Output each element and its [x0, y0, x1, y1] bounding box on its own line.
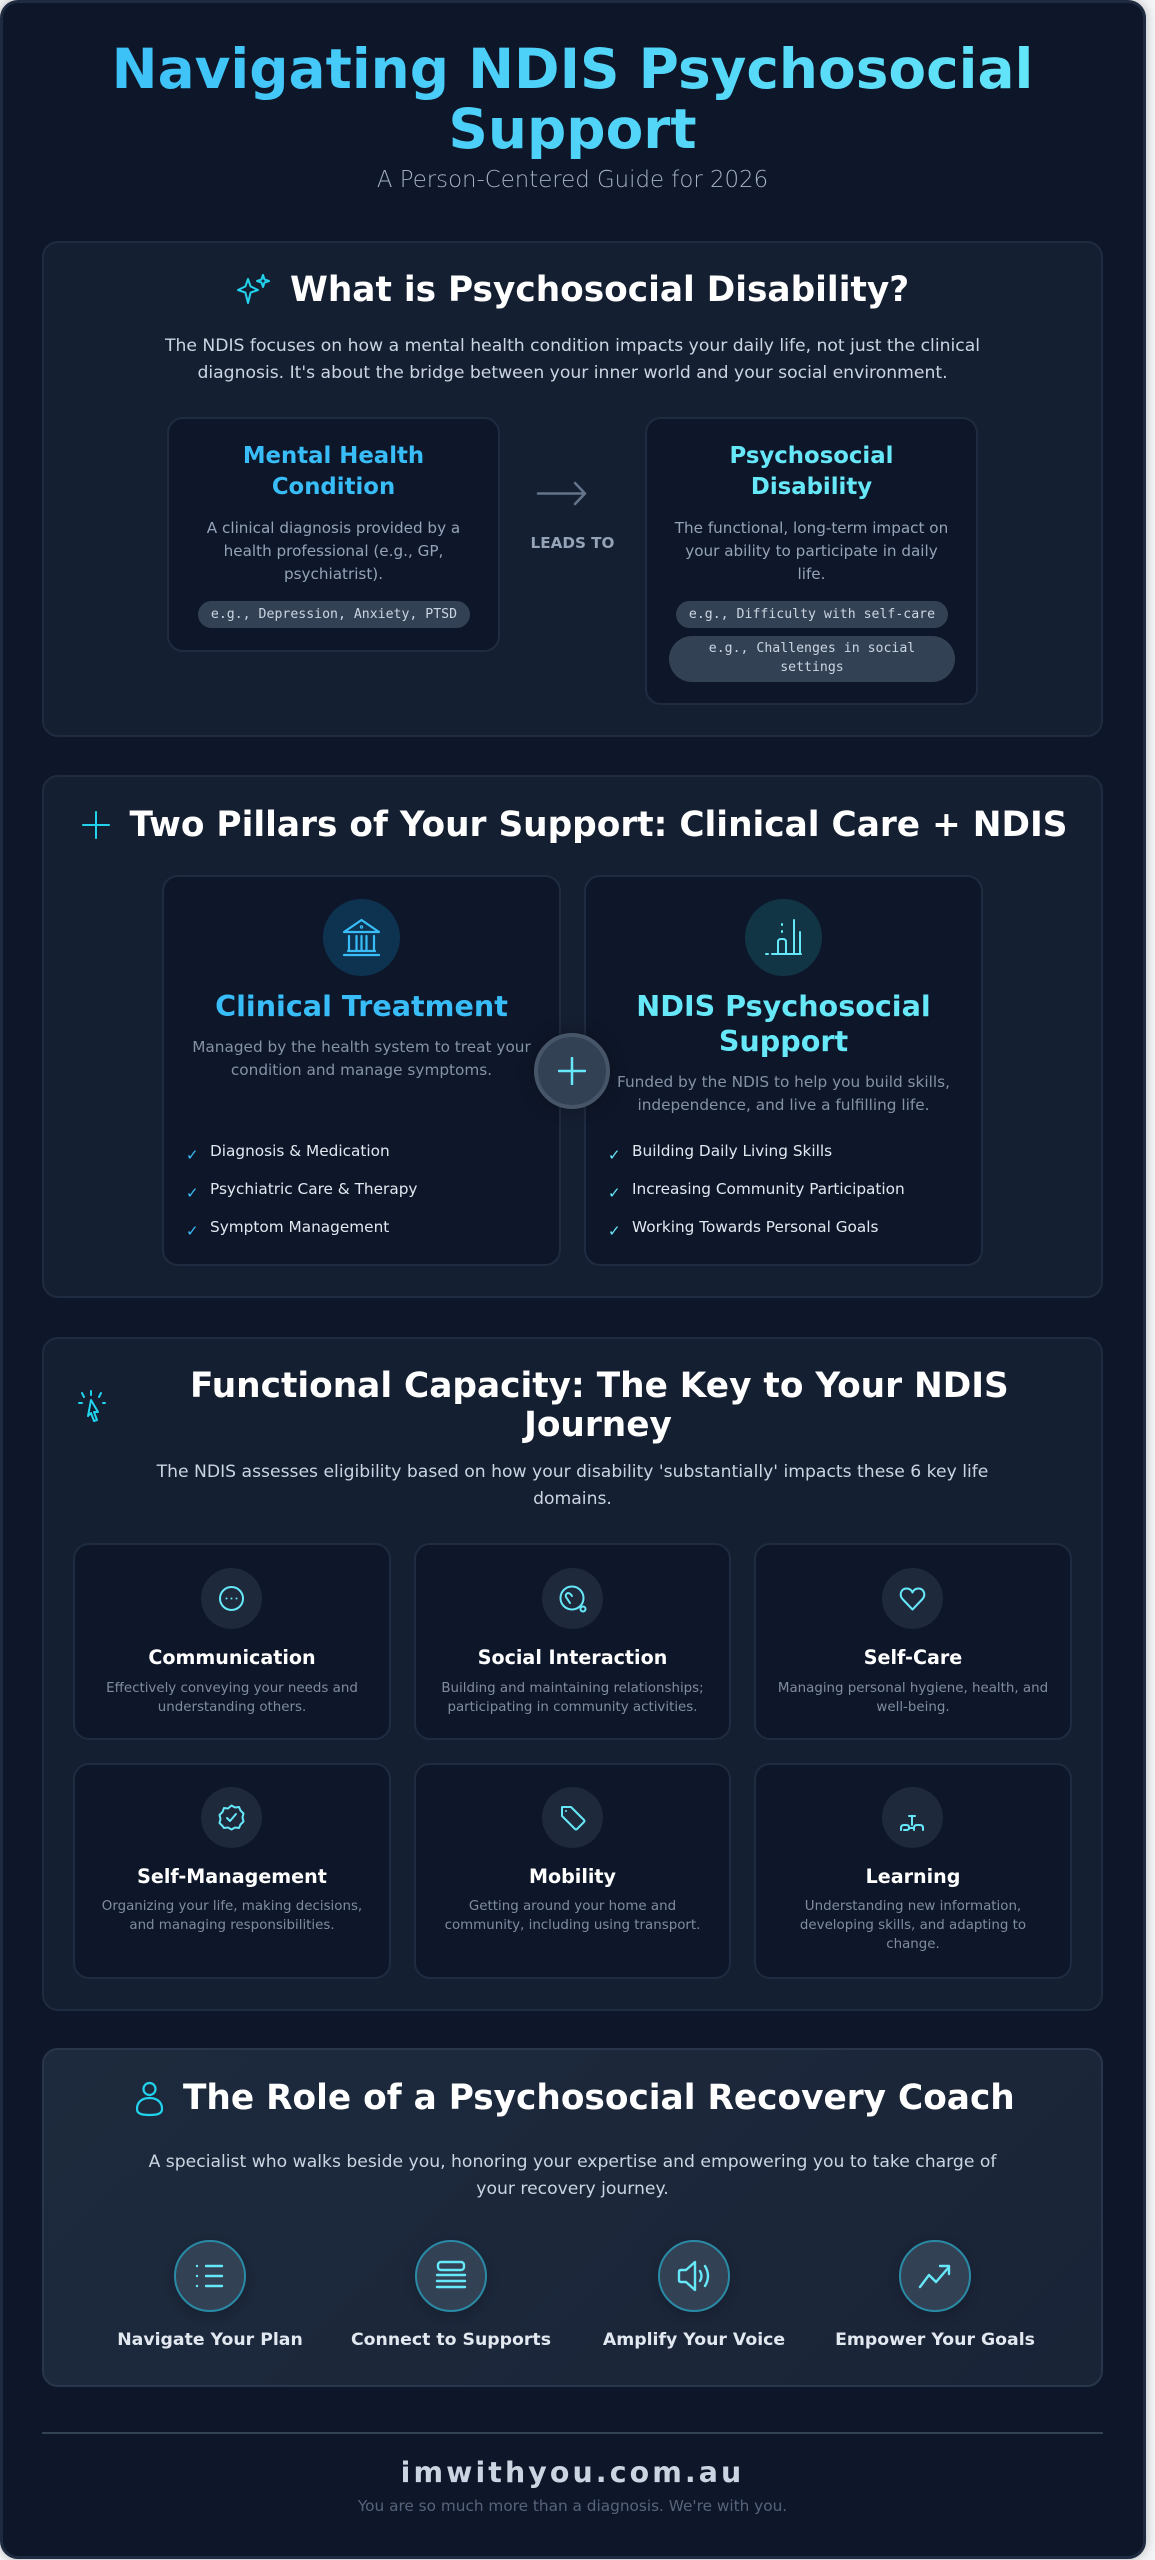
heading: what is psychosocial disability: What is Psychosocial Disability? [290, 270, 909, 310]
role: empower your goals [835, 2240, 1035, 2350]
icon: person [136, 2082, 164, 2116]
label: Amplify Your Voice [603, 2330, 785, 2350]
heading [730, 443, 893, 500]
heading: ndis psychosocial support: NDIS Psychosocial [636, 989, 931, 1023]
intro text [156, 1462, 988, 1509]
heading: two pillars: Two Pillars of Your Support: Clinical Care + NDIS [130, 805, 1067, 845]
description: Organizing your life, making decisions, [102, 1899, 362, 1914]
intro text [148, 2152, 997, 2199]
description [617, 1073, 950, 1114]
description: developing skills, and adapting to [800, 1918, 1026, 1933]
description [441, 1680, 704, 1714]
card: mental health condition [167, 417, 500, 652]
description: change. [886, 1937, 940, 1952]
icon: social [542, 1568, 603, 1629]
description [206, 519, 460, 583]
icon: speaker [658, 2240, 730, 2312]
heading: ndis psychosocial support [636, 989, 931, 1058]
heading [243, 443, 424, 500]
description: Funded by the NDIS to help you build skills, [617, 1073, 950, 1091]
example pill [198, 601, 470, 628]
description [445, 1899, 700, 1933]
list: ndis support [608, 1142, 905, 1240]
description: condition and manage symptoms. [231, 1061, 492, 1079]
example pill: e.g., Difficulty with self-care [689, 607, 935, 622]
description [800, 1899, 1026, 1952]
check: ✓ [186, 1184, 199, 1202]
intro text: your recovery journey. [476, 2179, 669, 2199]
title: Support [448, 97, 697, 161]
icon: sparkles [237, 274, 270, 304]
description: well-being. [876, 1700, 950, 1714]
intro text: A specialist who walks beside you, honoring your expertise and empowering you to take charge of [149, 2152, 996, 2172]
description [102, 1899, 362, 1933]
icon: list [174, 2240, 246, 2312]
icon: tag [542, 1787, 603, 1848]
title: Social Interaction [478, 1646, 667, 1669]
description: understanding others. [158, 1700, 306, 1714]
title [0, 39, 1145, 159]
item: Working Towards Personal Goals [632, 1218, 878, 1236]
domain card: self-care [754, 1543, 1072, 1740]
description: independence, and live a fulfilling life. [637, 1096, 930, 1114]
domain card: learning [754, 1763, 1072, 1979]
check: ✓ [186, 1146, 199, 1164]
example pill [676, 601, 948, 628]
role: navigate your plan [117, 2240, 303, 2350]
heading: recovery coach: The Role of a Psychosocial Recovery Coach [183, 2078, 1015, 2118]
heading: functional capacity: Functional Capacity: The Key to Your NDIS [190, 1366, 1009, 1406]
intro text: domains. [533, 1489, 612, 1509]
title: Mobility [529, 1865, 616, 1888]
icon: stack [415, 2240, 487, 2312]
example pill: e.g., Depression, Anxiety, PTSD [211, 607, 457, 622]
list: clinical treatment [186, 1142, 417, 1240]
icon: plus [82, 811, 110, 839]
example pill: e.g., Challenges in social [709, 641, 915, 656]
description [778, 1680, 1048, 1714]
item: Increasing Community Participation [632, 1180, 905, 1198]
item: Diagnosis & Medication [210, 1142, 390, 1160]
footer: tagline: You are so much more than a diagnosis. We're with you. [358, 2497, 787, 2515]
title: Navigating NDIS Psychosocial [112, 37, 1033, 101]
heading: Disability [751, 474, 872, 500]
heading: Condition [272, 474, 395, 500]
icon: badge check [201, 1787, 262, 1848]
description: psychiatrist). [284, 565, 383, 583]
intro text: The NDIS focuses on how a mental health condition impacts your daily life, not just the clinical [165, 336, 980, 356]
subtitle: A Person-Centered Guide for 2026 [377, 167, 768, 193]
label: Empower Your Goals [835, 2330, 1035, 2350]
intro text: The NDIS assesses eligibility based on how your disability 'substantially' impacts these 6 key life [157, 1462, 988, 1482]
heading: clinical treatment: Clinical Treatment [215, 989, 508, 1023]
title: Communication [148, 1646, 316, 1669]
heading: functional capacity: Journey [524, 1404, 672, 1444]
icon: trending up [899, 2240, 971, 2312]
icon: building chart [745, 899, 822, 976]
role: connect to supports [351, 2240, 551, 2350]
panel: recovery coach [42, 2048, 1103, 2387]
check: ✓ [608, 1146, 621, 1164]
description: Managed by the health system to treat your [192, 1038, 531, 1056]
card: ndis psychosocial support [584, 875, 983, 1266]
description: Understanding new information, [805, 1899, 1021, 1914]
domain card: communication [73, 1543, 391, 1740]
check: ✓ [186, 1222, 199, 1240]
label: leads to: LEADS TO [531, 534, 614, 552]
plus connector [534, 1033, 610, 1109]
heading: functional capacity [190, 1366, 1009, 1444]
arrow: leads to [536, 482, 586, 506]
icon: cursor click [78, 1390, 106, 1422]
description: life. [798, 565, 825, 583]
description: and managing responsibilities. [129, 1918, 335, 1933]
icon: heart [882, 1568, 943, 1629]
description [674, 519, 948, 583]
heading: Psychosocial [730, 443, 893, 469]
description: Getting around your home and [469, 1899, 676, 1914]
icon: landmark [323, 899, 400, 976]
example pill: settings [780, 660, 844, 675]
description: A clinical diagnosis provided by a [207, 519, 460, 537]
description: participating in community activities. [447, 1700, 698, 1714]
domain card: mobility [414, 1763, 731, 1979]
description: The functional, long-term impact on [675, 519, 948, 537]
footer divider [42, 2432, 1103, 2434]
icon: learning [882, 1787, 943, 1848]
check: ✓ [608, 1222, 621, 1240]
label: Navigate Your Plan [117, 2330, 303, 2350]
intro text [164, 336, 980, 383]
title: Learning [866, 1865, 960, 1888]
card: clinical treatment [162, 875, 561, 1266]
description: Building and maintaining relationships; [441, 1680, 704, 1696]
heading: Mental Health [243, 443, 424, 469]
panel: what is psychosocial disability [42, 241, 1103, 737]
label: Connect to Supports [351, 2330, 551, 2350]
title: Self-Care [864, 1646, 962, 1669]
description [106, 1680, 358, 1714]
title: Self-Management [137, 1865, 327, 1888]
description [192, 1038, 531, 1079]
description: community, including using transport. [445, 1918, 700, 1933]
intro text: diagnosis. It's about the bridge between your inner world and your social environment. [197, 363, 948, 383]
card: psychosocial disability [645, 417, 978, 705]
description: health professional (e.g., GP, [224, 542, 443, 560]
item: Building Daily Living Skills [632, 1142, 832, 1160]
example pill [669, 636, 955, 682]
domain card: self-management [73, 1763, 391, 1979]
item: Psychiatric Care & Therapy [210, 1180, 417, 1198]
check: ✓ [608, 1184, 621, 1202]
panel: functional capacity [42, 1337, 1103, 2011]
heading: ndis psychosocial support: Support [719, 1024, 848, 1058]
description: your ability to participate in daily [685, 542, 938, 560]
domain card: social interaction [414, 1543, 731, 1740]
item: Symptom Management [210, 1218, 389, 1236]
footer: website: imwithyou.com.au [401, 2456, 744, 2489]
description: Managing personal hygiene, health, and [778, 1680, 1048, 1696]
description: Effectively conveying your needs and [106, 1680, 358, 1696]
panel: two pillars [42, 775, 1103, 1298]
icon: message [201, 1568, 262, 1629]
role: amplify your voice [603, 2240, 785, 2350]
